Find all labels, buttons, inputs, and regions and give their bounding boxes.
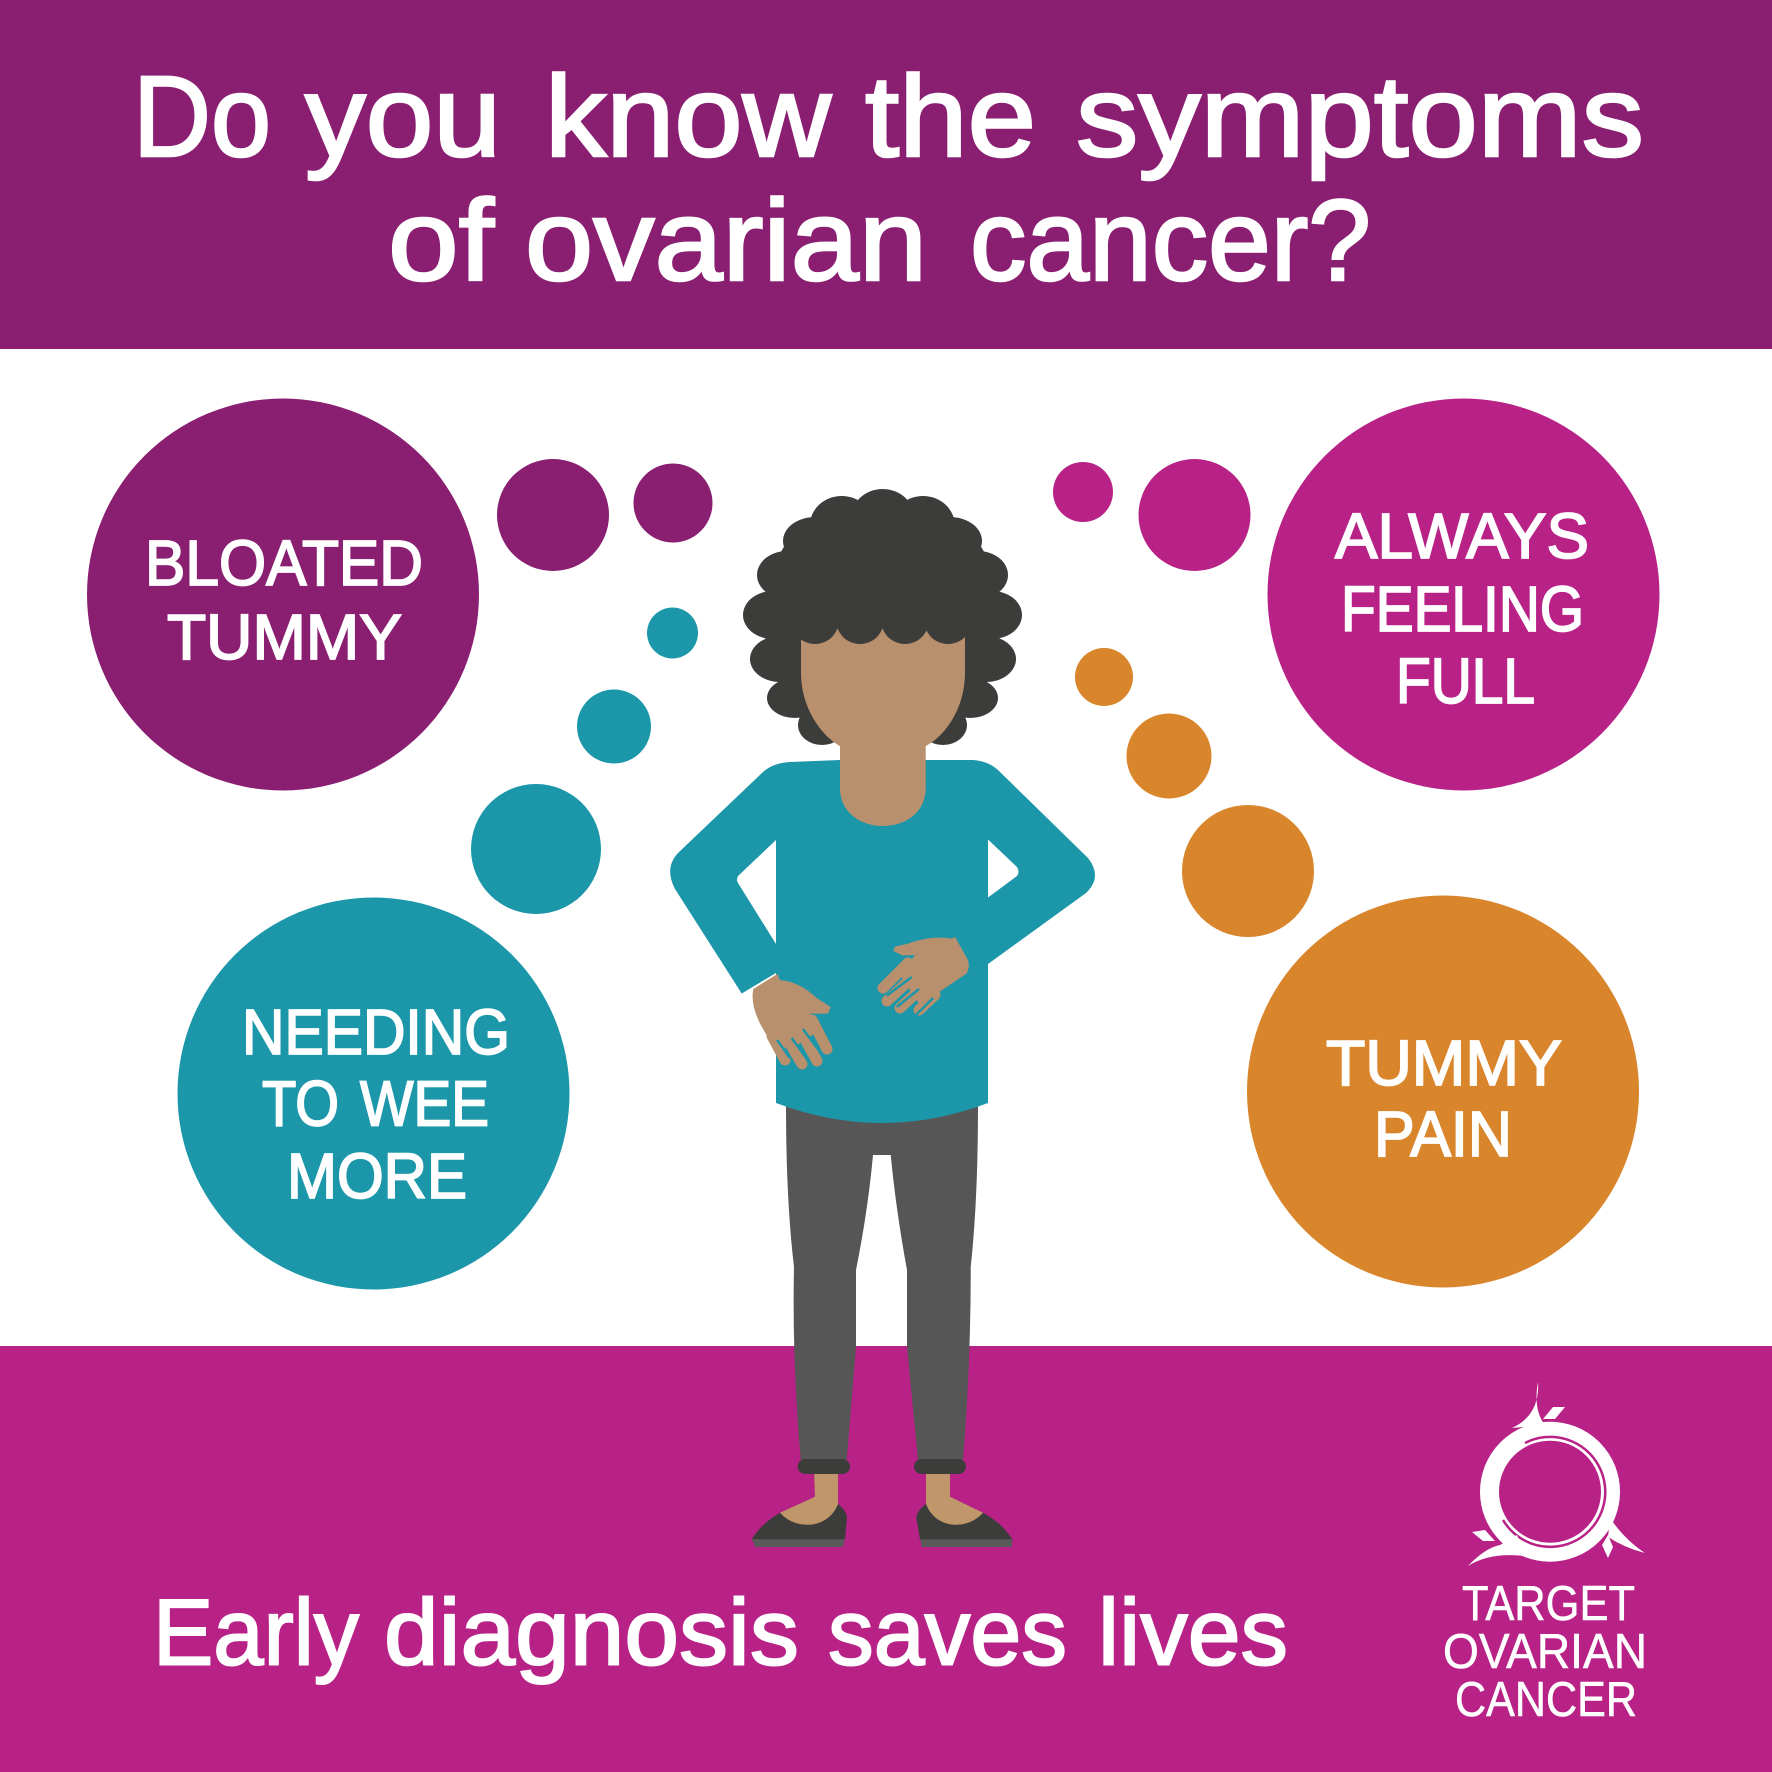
symptom: bloated tummy [87, 398, 479, 790]
trouser cuffs [798, 1459, 966, 1474]
symptom: always feeling full: FULL [1396, 645, 1535, 717]
tagline [153, 1580, 1288, 1685]
logo wordmark: CANCER [1455, 1673, 1637, 1727]
logo wordmark: TARGET [1462, 1577, 1635, 1631]
title: you [305, 53, 501, 181]
symptom: always feeling full: FEELING [1341, 573, 1584, 645]
symptom: needing to wee more: TO [262, 1068, 339, 1140]
title: of [388, 177, 495, 305]
thought bubbles: magenta [1053, 459, 1250, 571]
right hand [883, 937, 969, 1016]
tagline: diagnosis [384, 1580, 799, 1685]
symptom: bloated tummy: BLOATED [145, 527, 423, 599]
symptom: always feeling full: ALWAYS [1335, 500, 1589, 572]
face and neck [801, 625, 965, 826]
thought bubbles: purple [497, 459, 712, 571]
shoes [752, 1504, 1012, 1539]
shoe soles [752, 1538, 1012, 1547]
symptom: tummy pain [1247, 896, 1639, 1288]
woman figure [670, 489, 1095, 1547]
title: cancer? [970, 177, 1371, 305]
header band [0, 0, 1772, 349]
symptom: always feeling full [1268, 398, 1660, 790]
symptom: needing to wee more: WEE [360, 1068, 489, 1140]
title: Do [133, 53, 271, 181]
symptom: needing to wee more: MORE [287, 1140, 467, 1212]
thought bubbles: teal [471, 608, 698, 914]
title: symptoms [1076, 53, 1644, 181]
footer band [0, 1346, 1772, 1772]
thought bubbles: orange [1075, 648, 1314, 937]
logo: Target Ovarian Cancer [1443, 1382, 1647, 1727]
tagline: saves [828, 1580, 1067, 1685]
symptom: tummy pain: PAIN [1374, 1098, 1512, 1170]
title [133, 53, 1644, 305]
symptom: tummy pain: TUMMY [1326, 1027, 1562, 1099]
symptom: needing to wee more [178, 898, 570, 1290]
title: ovarian [525, 177, 927, 305]
title: the [865, 53, 1036, 181]
logo wordmark [1443, 1577, 1647, 1727]
logo ring emblem [1468, 1382, 1645, 1566]
title: know [545, 53, 832, 181]
trousers [786, 1105, 978, 1460]
symptom: bloated tummy: TUMMY [167, 601, 402, 673]
left hand [753, 974, 831, 1064]
tagline: lives [1098, 1580, 1288, 1685]
teal top [670, 760, 1095, 1123]
tagline: Early [153, 1580, 359, 1685]
hair [743, 489, 1022, 745]
ankles and feet [780, 1470, 983, 1530]
logo wordmark: OVARIAN [1443, 1625, 1647, 1679]
hair fringe [791, 590, 972, 644]
symptom: needing to wee more: NEEDING [242, 996, 510, 1068]
